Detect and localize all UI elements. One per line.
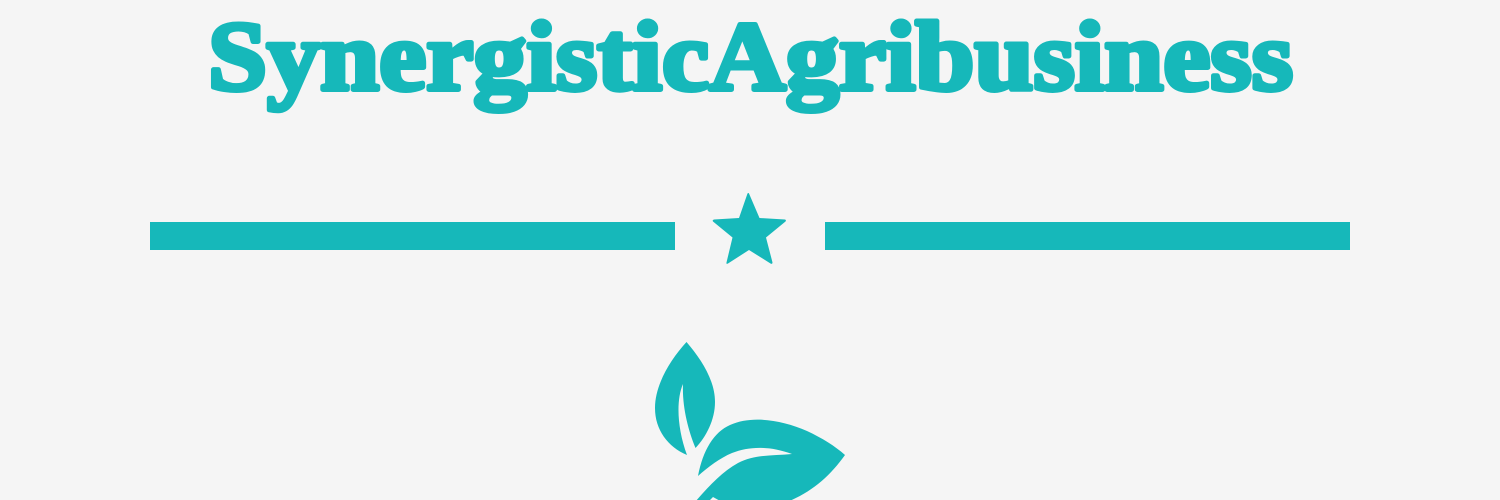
icon: star — [713, 193, 786, 264]
divider left bar — [150, 222, 675, 250]
icon: lower leaf — [695, 420, 845, 500]
divider right bar — [825, 222, 1350, 250]
title: SynergisticAgribusiness — [208, 2, 1293, 112]
icon: upper leaf — [655, 342, 715, 455]
icon: leaves — [655, 342, 845, 500]
